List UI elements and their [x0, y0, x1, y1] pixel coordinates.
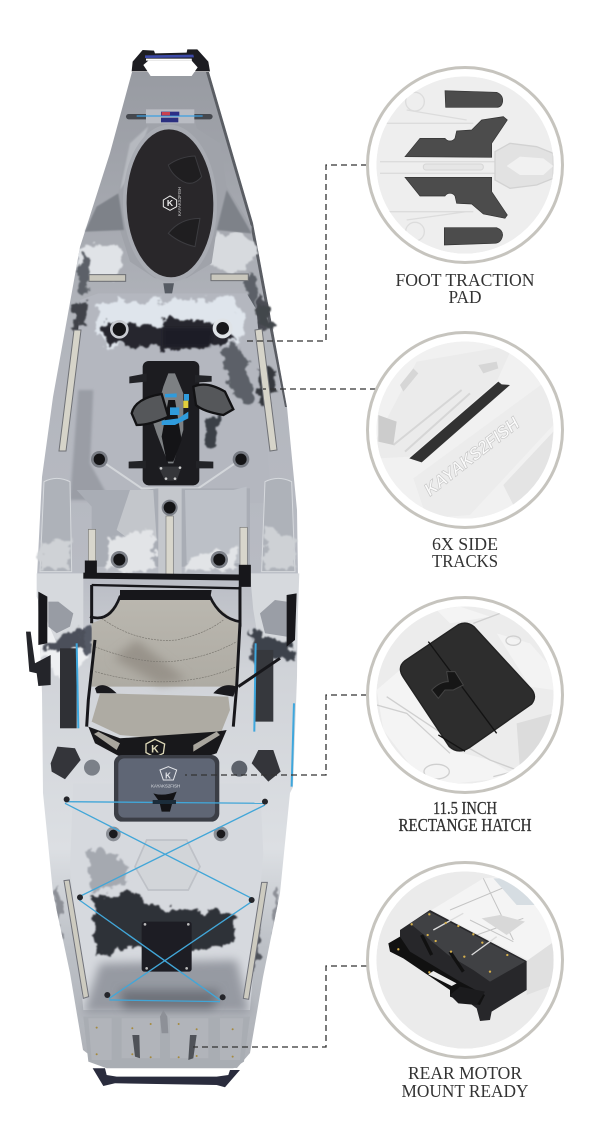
label: rectangle hatch	[398, 798, 532, 835]
traction pads	[405, 91, 507, 245]
camouflage mottling	[40, 72, 287, 969]
track	[409, 382, 510, 462]
rear hatch	[114, 755, 219, 822]
bow hatch cover: K	[167, 198, 174, 208]
label: rear motor mount: REAR MOTOR	[408, 1063, 522, 1083]
seat cushion	[92, 693, 230, 738]
rear deck	[83, 1010, 250, 1068]
front foot wells	[110, 318, 233, 339]
circle image: side tracks	[376, 341, 554, 519]
pedal plate	[158, 467, 182, 481]
seat	[83, 561, 280, 767]
front cockpit well	[68, 293, 277, 503]
center and seat tracks	[88, 516, 247, 574]
rear side tracks	[64, 880, 267, 999]
label: rectangle hatch: 11.5 INCH	[433, 798, 497, 818]
deck pads	[51, 747, 281, 782]
label: side tracks	[432, 534, 498, 571]
label: rear motor mount	[402, 1063, 528, 1101]
rear hatch: K	[165, 771, 171, 780]
label: side tracks: TRACKS	[432, 551, 498, 571]
side accessory pockets	[26, 592, 297, 787]
dashed leader: motor mount	[193, 966, 377, 1047]
left pedal	[132, 394, 168, 425]
bow hatch cover	[125, 129, 215, 278]
circle image: foot traction pad	[376, 76, 554, 254]
bow handle	[132, 49, 210, 71]
cockpit drain holes	[111, 500, 228, 568]
blue pedal links	[162, 393, 188, 425]
kayak top view	[26, 49, 299, 1087]
side tracks	[59, 329, 277, 451]
small bow tracks	[89, 274, 248, 281]
label: foot traction pad: FOOT TRACTION	[396, 270, 534, 290]
label: rear motor mount: MOUNT READY	[402, 1081, 528, 1101]
motor mount body	[388, 910, 527, 1021]
label: foot traction pad	[396, 270, 534, 307]
seat frame	[83, 561, 280, 727]
circle image: rear motor mount	[376, 871, 554, 1049]
seat front logo pouch: K	[151, 744, 159, 756]
strap and clasp	[428, 642, 497, 751]
foot pedal console	[129, 361, 233, 485]
bungee anchors	[64, 796, 268, 1000]
hatch	[400, 623, 534, 751]
hatch strap clasp	[153, 800, 176, 804]
hull	[37, 72, 298, 1068]
callout: side tracks	[368, 332, 562, 528]
bow section	[85, 61, 252, 305]
dashed leader: foot traction pad	[243, 165, 377, 341]
label: side tracks: 6X SIDE	[432, 534, 498, 554]
stern section	[64, 755, 268, 1087]
callout: rectangle hatch	[368, 598, 562, 792]
bow drain spout	[163, 283, 174, 305]
side storage panels	[40, 478, 295, 572]
kayak brand decal: KAYAKS2FISH	[420, 413, 524, 500]
label: rectangle hatch: RECTANGE HATCH	[398, 815, 532, 835]
right pedal	[193, 385, 233, 415]
mid cockpit section	[26, 478, 299, 787]
dashed leader: side tracks	[263, 388, 386, 390]
stern handle	[93, 1068, 240, 1087]
embossed hexagon logo	[135, 840, 200, 890]
label: foot traction pad: PAD	[448, 287, 482, 307]
callout: rear motor mount	[368, 862, 562, 1058]
motor mount plate	[142, 922, 192, 972]
callout: foot traction pad	[368, 68, 562, 262]
bungee cords	[65, 802, 265, 1002]
circle image: rectangle hatch	[376, 606, 554, 787]
bow bungee and flag	[126, 109, 213, 123]
seat front logo pouch	[88, 727, 227, 767]
mid foot wells	[91, 451, 249, 468]
rear hatch: KAYAKS2FISH	[151, 783, 180, 788]
bow raised collar	[85, 112, 252, 278]
dashed leader: hatch	[185, 695, 377, 775]
bow hatch cover: KAYAKS2FISH	[177, 187, 182, 216]
foot wells	[106, 827, 228, 841]
